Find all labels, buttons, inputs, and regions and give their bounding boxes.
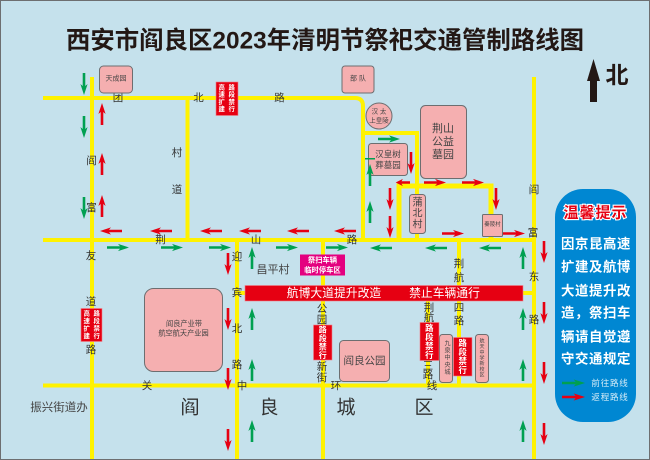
- tag: 荆航四路 closure: [454, 338, 472, 376]
- notice body: 造，祭扫车: [561, 304, 631, 320]
- road labels: 关: [142, 379, 153, 392]
- 阎良产业带航空航天产业园: 阎良产业带: [166, 319, 202, 328]
- tag: temporary parking: 祭扫车辆: [308, 256, 338, 264]
- 汉皇树葬墓园: 葬墓园: [375, 160, 401, 170]
- 汉太上皇陵: 上皇陵: [369, 116, 389, 124]
- place label: 振兴街道办: 振兴街道办: [30, 400, 88, 414]
- 荆山公益墓园: 墓园: [432, 148, 454, 161]
- road labels: 三: [423, 360, 433, 372]
- road labels: 路: [347, 233, 358, 246]
- 天成园: [100, 66, 132, 93]
- 荆山公益墓园: 公益: [432, 134, 454, 148]
- 蒲北村: 蒲: [412, 196, 422, 208]
- district label: 阎: [180, 396, 200, 418]
- road labels: 路: [274, 91, 285, 104]
- tag: north road closure: 段: [229, 90, 236, 99]
- tag: 公园新街 closure: 路: [319, 324, 327, 334]
- road labels: 路: [529, 313, 540, 326]
- road labels: 园: [317, 314, 327, 326]
- banner: 航博大道 closure: 禁止车辆通行: [409, 286, 480, 300]
- road labels: 友: [86, 249, 97, 262]
- district label: 良: [259, 396, 279, 418]
- notice heading: 温馨提示: [563, 204, 628, 222]
- tag: 荆航三路 closure: [420, 322, 439, 360]
- notice body: 扩建及航博: [561, 258, 631, 274]
- tag: west road closure: 速: [84, 316, 91, 325]
- road labels: 团: [113, 92, 123, 104]
- notice body: 守交通规定: [561, 350, 631, 366]
- tag: 公园新街 closure: 段: [319, 333, 327, 343]
- road labels: 公: [317, 303, 328, 315]
- icon: north arrow: 北: [606, 62, 628, 88]
- road labels: 富: [86, 201, 97, 214]
- tag: temporary parking: 临时停车区: [304, 266, 341, 274]
- notice body: 辆请自觉遵: [561, 328, 631, 344]
- tag: north road closure: 高: [219, 82, 226, 92]
- 秦陵村: [482, 214, 502, 236]
- road labels: 富: [528, 226, 538, 239]
- 九泉中央城: [440, 334, 452, 382]
- tag: 荆航四路 closure: 路: [459, 338, 468, 348]
- road labels: 街: [317, 371, 328, 384]
- tag: 荆航三路 closure: 段: [425, 332, 434, 342]
- road labels: 中: [237, 379, 247, 392]
- tag: 荆航四路 closure: 行: [459, 365, 468, 375]
- road labels: 路: [423, 368, 434, 381]
- tag: west road closure: 段: [94, 316, 101, 325]
- road network: [43, 77, 534, 459]
- road labels: 荆: [424, 301, 434, 314]
- tag: 荆航四路 closure: 段: [459, 347, 468, 357]
- icon: north arrow: [587, 59, 628, 102]
- road labels: 北: [193, 92, 204, 104]
- banner: 航博大道 closure: 航博大道提升改造: [287, 286, 381, 300]
- road labels: 山: [251, 234, 261, 246]
- panel: travel notice: [555, 189, 636, 422]
- road labels: 阎: [529, 183, 539, 196]
- title: 西安市阎良区2023年清明节祭祀交通管制路线图: [66, 26, 584, 54]
- road labels: 环: [331, 380, 341, 392]
- 航天中学新校区: [476, 334, 488, 382]
- red arrows: return route: [98, 103, 548, 451]
- road labels: [86, 91, 540, 392]
- road labels: 路: [232, 358, 243, 371]
- 航天中学新校区: 航天中学新校区: [478, 337, 484, 378]
- road labels: 线: [427, 379, 438, 392]
- 阎良产业带航空航天产业园: 航空航天产业园: [158, 328, 209, 338]
- road labels: 迎: [232, 251, 243, 263]
- tag: 荆航三路 closure: 行: [425, 350, 434, 360]
- tag: north road closure: 扩: [219, 97, 226, 106]
- tag: west road closure: 路: [94, 308, 101, 318]
- road labels: 航: [424, 311, 435, 324]
- tag: north road closure: 行: [229, 104, 236, 113]
- place label: 昌平村: 昌平村: [256, 262, 290, 276]
- tag: west road closure: 行: [94, 331, 101, 340]
- road labels: 北: [232, 323, 243, 335]
- tag: west road closure: 禁: [94, 324, 101, 332]
- road labels: 四: [454, 302, 464, 314]
- landmark boxes: [100, 66, 502, 382]
- tag: north road closure: [216, 82, 238, 116]
- 蒲北村: 村: [412, 218, 422, 230]
- road labels: 路: [86, 343, 97, 356]
- road labels: 荆: [454, 257, 464, 270]
- 汉皇树葬墓园: 汉皇树: [375, 149, 401, 159]
- road labels: 道: [86, 295, 97, 308]
- district label: [180, 396, 434, 418]
- 荆山公益墓园: [420, 106, 466, 178]
- 天成园: 天成园: [106, 74, 126, 82]
- 汉太上皇陵: [366, 103, 392, 129]
- 秦陵村: 秦陵村: [484, 220, 501, 228]
- tag: north road closure: 速: [219, 90, 226, 99]
- road labels: 村: [172, 146, 183, 159]
- tag: 荆航三路 closure: 路: [425, 323, 434, 333]
- legend: return: [562, 392, 629, 402]
- 阎良产业带航空航天产业园: [144, 288, 222, 372]
- tag: 公园新街 closure: 禁: [319, 342, 327, 352]
- road labels: 航: [454, 271, 465, 284]
- 九泉中央城: 九泉中央城: [443, 339, 450, 376]
- road labels: 路: [454, 314, 465, 327]
- tag: west road closure: 扩: [84, 324, 91, 332]
- tag: north road closure: 建: [219, 104, 226, 113]
- road labels: 道: [172, 183, 183, 196]
- notice body: [561, 236, 631, 366]
- district label: 城: [336, 396, 356, 418]
- tag: 公园新街 closure: [314, 324, 332, 360]
- 部队: [342, 66, 374, 93]
- road labels: 新: [317, 360, 328, 373]
- legend: outbound: 前往路线: [591, 378, 629, 388]
- 蒲北村: 北: [412, 208, 422, 220]
- notice body: 因京昆高速: [561, 236, 631, 252]
- notice body: 大道提升改: [561, 282, 631, 298]
- legend: outbound: [562, 378, 629, 388]
- road labels: 阎: [86, 154, 97, 167]
- 蒲北村: [410, 194, 426, 234]
- 荆山公益墓园: 荆山: [432, 122, 454, 135]
- tag: west road closure: [81, 308, 102, 342]
- tag: temporary parking: [300, 254, 345, 276]
- tag: north road closure: 路: [229, 82, 236, 92]
- tag: west road closure: 建: [84, 331, 91, 340]
- tag: 荆航四路 closure: 禁: [459, 356, 468, 366]
- road labels: 荆: [155, 233, 166, 246]
- 汉太上皇陵: 汉 太: [372, 106, 387, 116]
- tag: 荆航三路 closure: 禁: [425, 341, 434, 351]
- tag: north road closure: 禁: [229, 97, 236, 106]
- district label: 区: [414, 398, 434, 418]
- road labels: 宾: [232, 286, 242, 299]
- legend: return: 返程路线: [591, 392, 629, 402]
- green arrows: outbound route: [80, 73, 527, 442]
- road labels: 东: [529, 270, 539, 283]
- 汉皇树葬墓园: [368, 144, 408, 176]
- tag: 公园新街 closure: 行: [319, 350, 327, 360]
- 阎良公园: [340, 340, 390, 382]
- tag: west road closure: 高: [84, 308, 91, 318]
- banner: 航博大道 closure: [245, 286, 523, 301]
- 部队: 部 队: [350, 74, 366, 82]
- 阎良公园: 阎良公园: [344, 354, 386, 367]
